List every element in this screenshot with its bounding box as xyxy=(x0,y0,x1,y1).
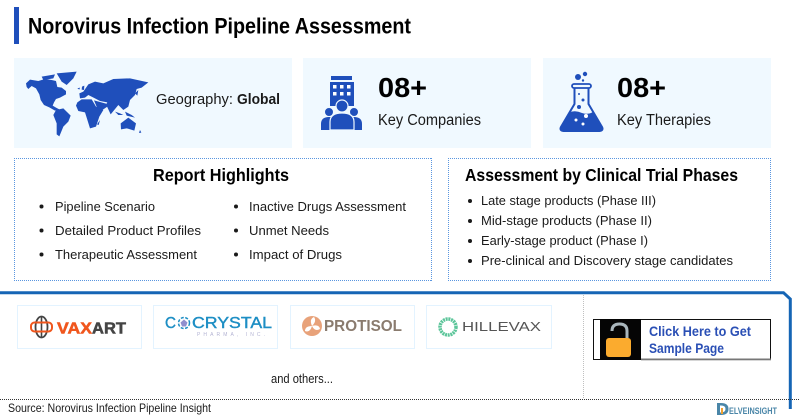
list: highlights left: Pipeline Scenario xyxy=(55,199,155,214)
logo: cocrystal: PHARMA, INC. xyxy=(197,332,265,338)
logo: cocrystal xyxy=(154,306,278,348)
logo: delveinsight: ELVEINSIGHT xyxy=(729,406,777,417)
cta text: Click Here to Get xyxy=(649,323,751,339)
list: highlights left xyxy=(40,199,201,262)
logo: protisol: PROTISOL xyxy=(324,318,402,335)
panel: key therapies xyxy=(543,58,771,148)
geography label: Geography: xyxy=(156,91,233,108)
title: Norovirus Infection Pipeline Assessment xyxy=(28,14,411,38)
stat: 08+ companies: 08+ xyxy=(378,72,427,103)
list: highlights left: Therapeutic Assessment xyxy=(55,247,197,262)
logo: vaxart xyxy=(18,306,142,348)
panel: key companies xyxy=(303,58,531,148)
logo: cocrystal: C xyxy=(165,315,176,332)
cta text xyxy=(649,323,751,356)
list: highlights right: Impact of Drugs xyxy=(249,247,342,262)
cta text: Sample Page xyxy=(649,340,724,356)
icon: flask xyxy=(560,72,602,131)
icon: open padlock xyxy=(606,324,631,357)
logo: cocrystal: CRYSTAL xyxy=(192,315,272,332)
geography label: Global xyxy=(237,91,280,108)
source note: Source: Norovirus Infection Pipeline Insight xyxy=(8,401,212,415)
heading: report highlights: Report Highlights xyxy=(153,165,289,185)
icon: building with people xyxy=(321,76,362,130)
list: phases: Pre-clinical and Discovery stage candidates xyxy=(481,253,733,268)
icon: protisol propeller xyxy=(302,316,322,336)
icon: hillevax ring xyxy=(440,319,456,335)
call to action button xyxy=(594,319,771,360)
list: highlights right: Unmet Needs xyxy=(249,223,329,238)
list: phases: Late stage products (Phase III) xyxy=(481,193,656,208)
icon: world map xyxy=(26,72,148,136)
logo: vaxart: VAX xyxy=(57,320,93,338)
logo: delveinsight xyxy=(717,403,777,417)
and others note: and others... xyxy=(271,372,333,386)
label: key companies: Key Companies xyxy=(378,112,481,129)
stat: 08+ therapies: 08+ xyxy=(617,72,666,103)
panel: clinical trial phases xyxy=(448,158,771,281)
list: phases xyxy=(468,193,733,268)
logo: protisol xyxy=(290,306,414,348)
logo: vaxart: ART xyxy=(92,320,127,338)
list: highlights right: Inactive Drugs Assessment xyxy=(249,199,406,214)
bottom frame line xyxy=(0,293,790,409)
icon: vaxart globe xyxy=(31,316,52,338)
logo: hillevax: HILLEVAX xyxy=(462,319,541,334)
icon: cocrystal gem xyxy=(178,318,190,328)
list: highlights right xyxy=(234,199,406,262)
list: highlights left: Detailed Product Profiles xyxy=(55,223,201,238)
list: phases: Mid-stage products (Phase II) xyxy=(481,213,652,228)
label: key therapies: Key Therapies xyxy=(617,112,711,129)
panel: report highlights xyxy=(14,158,432,281)
logo: hillevax xyxy=(426,306,552,348)
list: phases: Early-stage product (Phase I) xyxy=(481,233,648,248)
title xyxy=(14,7,411,44)
panel: geography xyxy=(14,58,292,148)
heading: clinical trial phases: Assessment by Clinical Trial Phases xyxy=(465,165,738,185)
geography label xyxy=(156,91,280,108)
